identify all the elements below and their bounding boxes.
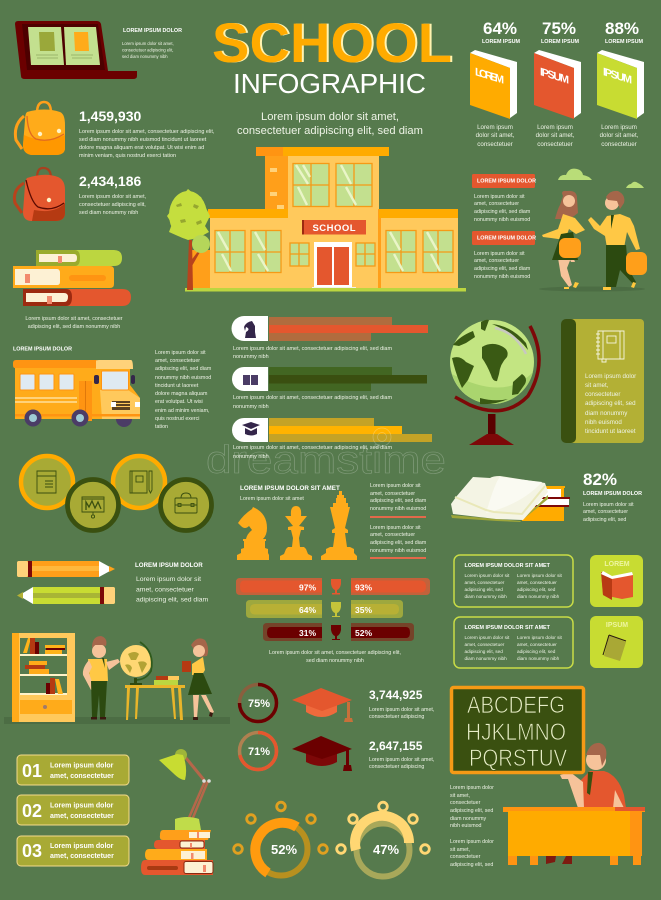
text: note body: Lorem ipsum dolor <box>585 373 636 380</box>
label: red tag two with text: amet, consectetuer <box>474 258 519 264</box>
text: teacher notes: adipiscing elit, sed <box>450 808 493 814</box>
stat: 2,434,186: consectetuer adipiscing elit, <box>79 202 146 208</box>
illustration: school building <box>185 147 466 292</box>
text: laptop caption: Lorem ipsum dolor sit amet, <box>122 41 174 46</box>
stat: 2,647,155: Lorem ipsum dolor sit amet, <box>369 757 434 763</box>
panel: outlined box one: Lorem ipsum dolor sit <box>517 573 563 578</box>
text: teacher notes: diam nonummy <box>450 816 487 822</box>
row: 64% vs 35%: 64% <box>299 605 316 615</box>
chart: ring 75%: 75% <box>248 698 270 710</box>
icon: orange book: LOREM <box>475 66 504 87</box>
stat: 64%: LOREM IPSUM <box>482 39 521 45</box>
text: books caption: Lorem ipsum dolor sit amet, consectetuer <box>25 316 123 322</box>
icon: king <box>321 491 357 560</box>
watermark: dreamstime <box>206 439 446 482</box>
text: chess notes: adipiscing elit, sed diam <box>370 540 427 546</box>
stat: 3,744,925: 3,744,925 <box>369 688 423 702</box>
row: 97% vs 93%: 97% <box>299 582 316 592</box>
illustration: classroom scene <box>4 633 230 724</box>
illustration: school bus <box>13 360 140 427</box>
panel: outlined box two: amet, consectetuer <box>517 642 557 647</box>
stat: 2,434,186 <box>79 173 147 216</box>
label: red tag two with text: LOREM IPSUM DOLOR <box>477 236 536 242</box>
text: laptop caption <box>122 28 182 59</box>
text: teacher notes: Lorem ipsum dolor <box>450 839 494 845</box>
step 01: amet, consectetuer <box>50 773 114 780</box>
illustration: two students walking <box>539 191 647 292</box>
panel: horizontal bars with icons <box>232 316 432 460</box>
icon: green book: IPSUM <box>603 66 632 87</box>
row: 97% vs 93%: 93% <box>355 582 372 592</box>
step 02: 02 <box>22 801 42 821</box>
text: chess notes: nonummy nibh euismod <box>370 548 426 554</box>
icon circle: notebook and pencil <box>113 456 165 508</box>
chart: donut 47% <box>337 802 429 876</box>
text: pencils caption: adipiscing elit, sed diam <box>136 596 208 604</box>
label: red tag one with text: adipiscing elit, sed diam <box>474 209 531 215</box>
text: note body: diam nonummy <box>585 410 628 417</box>
stat: 88%: 88% <box>605 19 639 38</box>
stat: 2,434,186: Lorem ipsum dolor sit amet, <box>79 194 147 200</box>
text: chess notes: Lorem ipsum dolor sit <box>370 483 421 489</box>
stat: 82%: LOREM IPSUM DOLOR <box>583 491 642 497</box>
title: INFOGRAPHIC <box>233 68 426 99</box>
tile: lorem book: LOREM <box>604 561 630 568</box>
title: SCHOOL <box>212 11 452 74</box>
stat: 1,459,930: dolore magna aliquam erat volutpat. Ut wisi enim ad <box>79 145 204 151</box>
panel: outlined box one: adipiscing elit, sed <box>464 587 503 592</box>
icon: knight <box>237 507 269 560</box>
text: bus description: nonummy nibh euismod <box>155 375 211 381</box>
stat: 64% <box>482 19 521 45</box>
bar row 2: book: nonummy nibh <box>233 404 269 410</box>
text: chess notes: amet, consectetuer <box>370 532 415 538</box>
panel: comparison bars with trophies <box>236 578 430 664</box>
stat: 3,744,925: consectetuer adipiscing <box>369 714 424 720</box>
text: laptop caption: sed diam nonummy nibh <box>122 54 168 59</box>
boy <box>83 636 120 720</box>
girl <box>542 191 585 289</box>
panel: outlined box two: adipiscing elit, sed <box>517 649 556 654</box>
panel: outlined box one: LOREM IPSUM DOLOR SIT AMET <box>464 563 551 569</box>
stat: 1,459,930 <box>79 108 215 159</box>
text: bus description: enim ad minim veniam, <box>155 408 209 414</box>
stat: 82%: Lorem ipsum dolor sit <box>583 502 634 508</box>
icon: dark graduation cap <box>292 736 352 771</box>
illustration: open book and stack <box>451 476 570 522</box>
illustration: desk lamp on books <box>141 749 213 875</box>
panel: outlined box two: LOREM IPSUM DOLOR SIT AMET <box>464 625 551 631</box>
stat: 3,744,925: Lorem ipsum dolor sit amet, <box>369 707 434 713</box>
step 02: amet, consectetuer <box>50 813 114 820</box>
stat: 1,459,930: 1,459,930 <box>79 108 141 124</box>
text: teacher notes: sit amet, <box>450 847 470 853</box>
step 02 <box>17 795 129 825</box>
stat: 88%: LOREM IPSUM <box>605 39 644 45</box>
label: red tag one with text: LOREM IPSUM DOLOR <box>477 178 536 184</box>
icon circle: book <box>21 456 73 508</box>
text: book captions: dolor sit amet, <box>476 132 515 139</box>
chalkboard: HJKLMNO <box>466 719 566 746</box>
text: book captions: consectetuer <box>537 141 573 148</box>
text: laptop caption: LOREM IPSUM DOLOR <box>123 28 182 34</box>
teacher <box>560 743 626 808</box>
bar row 1: chess <box>232 316 428 360</box>
stat: 82% <box>583 470 642 523</box>
heading: Lorem ipsum dolor sit amet <box>240 496 304 502</box>
row: 64% vs 35%: 35% <box>355 605 372 615</box>
text: note body: consectetuer <box>585 391 620 398</box>
panel: outlined box two: Lorem ipsum dolor sit <box>464 635 510 640</box>
text: bars caption: Lorem ipsum dolor sit amet, consectetuer adipiscing elit, <box>269 650 401 656</box>
stat: 3,744,925 <box>369 688 434 720</box>
stat: 1,459,930: Lorem ipsum dolor sit amet, consectetuer adipiscing elit, <box>79 129 215 135</box>
bar row 1: chess: nonummy nibh <box>233 354 269 360</box>
bar row 1: chess: Lorem ipsum dolor sit amet, consectetuer adipiscing elit, sed diam <box>233 346 392 352</box>
step 01: 01 <box>22 761 42 781</box>
text: teacher notes: consectetuer <box>450 800 481 806</box>
text: book captions <box>476 124 639 148</box>
row: 31% vs 52% <box>263 623 414 641</box>
panel: outlined box one: amet, consectetuer <box>517 580 557 585</box>
icon: notebook <box>596 331 624 362</box>
text: bus description: erat volutpat. Ut wisi <box>155 399 203 405</box>
label: red tag one with text: amet, consectetuer <box>474 201 519 207</box>
stat: 2,647,155: consectetuer adipiscing <box>369 764 424 770</box>
stat: 2,647,155: 2,647,155 <box>369 739 423 753</box>
panel: outlined box one <box>454 555 573 607</box>
teacher desk <box>503 807 645 865</box>
text: bars caption: sed diam nonummy nibh <box>306 658 364 664</box>
girl <box>182 638 214 720</box>
subtitle: Lorem ipsum dolor sit amet, <box>261 111 399 123</box>
panel: chess pieces <box>237 483 427 560</box>
text: chess notes: nonummy nibh euismod <box>370 506 426 512</box>
chart: donut 52% <box>234 802 327 876</box>
row: 64% vs 35% <box>246 600 403 618</box>
label: red tag two with text: nonummy nibh euismod <box>474 274 530 280</box>
text: bus description <box>155 350 212 430</box>
panel: outlined box two <box>454 617 573 668</box>
stat: 2,434,186: 2,434,186 <box>79 173 141 189</box>
panel: outlined box one: diam nonummy nibh <box>464 594 507 599</box>
text: note body: nibh euismod <box>585 419 622 426</box>
illustration: teacher and chalkboard <box>452 688 645 865</box>
icon: stack of books <box>13 250 131 306</box>
step 03: 03 <box>22 841 42 861</box>
boy <box>588 191 647 290</box>
label: red tag one with text: nonummy nibh euismod <box>474 217 530 223</box>
panel: outlined box one: diam nonummy nibh <box>517 594 560 599</box>
text: teacher notes: sit amet, <box>450 793 470 799</box>
text: bus description: tation <box>155 424 168 430</box>
illustration: school building: SCHOOL <box>312 223 356 234</box>
icon: pencils <box>17 561 115 604</box>
chart: ring 75% <box>240 684 276 722</box>
text: teacher notes: Lorem ipsum dolor <box>450 785 494 791</box>
label: red tag two with text: adipiscing elit, sed diam <box>474 266 531 272</box>
step 03 <box>17 836 129 866</box>
text: bus description: adipiscing elit, sed diam <box>155 366 212 372</box>
text: pencils caption <box>135 562 208 604</box>
row: 31% vs 52%: 31% <box>299 628 316 638</box>
step 01 <box>17 755 129 785</box>
bar row 3: graduation <box>232 418 432 460</box>
chart: ring 71% <box>240 732 276 770</box>
list: numbered steps <box>17 755 129 866</box>
stat: 75%: 75% <box>542 19 576 38</box>
panel: outlined box one: amet, consectetuer <box>464 580 505 585</box>
text: teacher notes: consectetuer <box>450 854 481 860</box>
stat: 82%: 82% <box>583 470 617 489</box>
panel: outlined box one: Lorem ipsum dolor sit <box>464 573 510 578</box>
icon: orange backpack <box>15 102 65 155</box>
text: book captions: consectetuer <box>477 141 513 148</box>
text: book captions: Lorem ipsum <box>601 124 637 131</box>
text: bus description: tincidunt ut laoreet <box>155 383 199 389</box>
stat: 88% <box>605 19 644 45</box>
icon: queen <box>280 506 312 560</box>
panel: outlined box two: amet, consectetuer <box>464 642 505 647</box>
text: chess notes: Lorem ipsum dolor sit <box>370 525 421 531</box>
step 03: Lorem ipsum dolor <box>50 843 114 850</box>
label: red tag two with text <box>472 231 536 280</box>
text: chess notes: amet, consectetuer <box>370 491 415 497</box>
stat: 2,647,155 <box>369 739 434 770</box>
stat: 75% <box>541 19 580 45</box>
tile: lorem book <box>590 555 643 607</box>
tile: ipsum book <box>590 616 643 668</box>
stat: 1,459,930: minim veniam, quis nostrud exerci tation <box>79 153 176 159</box>
watermark <box>206 428 446 482</box>
illustration: tree <box>167 189 210 290</box>
text: pencils caption: LOREM IPSUM DOLOR <box>135 562 203 569</box>
stat: 82%: adipiscing elit, sed <box>583 517 626 523</box>
label: red tag one with text: Lorem ipsum dolor sit <box>474 194 525 200</box>
text: bus description: quis nostrud exerci <box>155 416 199 422</box>
icon: red book <box>534 50 581 119</box>
stat: 1,459,930: sed diam nonummy nibh euismod tincidunt ut laoreet <box>79 137 207 143</box>
panel: outlined box two: Lorem ipsum dolor sit <box>517 635 563 640</box>
chalkboard: PQRSTUV <box>469 745 567 772</box>
chart: donut 47%: 47% <box>373 842 399 857</box>
text: teacher notes: nibh euismod <box>450 823 482 829</box>
icon: orange book <box>470 50 517 119</box>
text: teacher notes <box>450 785 494 868</box>
chalkboard <box>452 688 584 772</box>
row: 31% vs 52%: 52% <box>355 628 372 638</box>
stat: 2,434,186: sed diam nonummy nibh <box>79 210 138 216</box>
text: book captions: dolor sit amet, <box>536 132 575 139</box>
label: red tag one with text <box>472 174 536 223</box>
panel: outlined box two: diam nonummy nibh <box>517 656 560 661</box>
bar row 3: graduation: Lorem ipsum dolor sit amet, consectetuer adipiscing elit, sed diam <box>233 445 392 451</box>
subtitle: consectetuer adipiscing elit, sed diam <box>237 125 423 137</box>
panel: four icon circles <box>21 456 212 530</box>
icon circle: briefcase <box>160 480 212 530</box>
text: note body: tincidunt ut laoreet <box>585 428 636 435</box>
text: bus description: amet, consectetuer <box>155 358 200 364</box>
desk <box>125 676 185 720</box>
text: chess notes <box>370 483 427 559</box>
heading: LOREM IPSUM DOLOR SIT AMET <box>240 485 340 492</box>
icon circle: presentation board <box>68 480 118 530</box>
text: bus description: Lorem ipsum dolor sit <box>155 350 206 356</box>
panel: outlined box two: adipiscing elit, sed <box>464 649 503 654</box>
illustration: globe <box>450 320 539 445</box>
text: note body: adipiscing elit, sed <box>585 400 636 407</box>
step 03: amet, consectetuer <box>50 853 114 860</box>
text: bus description: dolore magna aliquam <box>155 391 208 397</box>
heading: bus: LOREM IPSUM DOLOR <box>13 346 72 352</box>
bar row 2: book: Lorem ipsum dolor sit amet, consectetuer adipiscing elit, sed diam <box>233 395 392 401</box>
panel: outlined box one: adipiscing elit, sed <box>517 587 556 592</box>
bookshelf <box>12 633 75 722</box>
text: pencils caption: amet, consectetuer <box>136 586 195 594</box>
title: SCHOOL <box>214 11 454 74</box>
text: book captions: consectetuer <box>601 141 637 148</box>
icon: green book <box>597 50 644 119</box>
icon: orange graduation cap <box>292 688 353 722</box>
subtitle <box>237 111 423 137</box>
text: laptop caption: consectetuer adipiscing elit, <box>122 48 173 52</box>
bar row 3: graduation: nonummy nibh <box>233 454 269 460</box>
text: bars caption <box>269 650 401 664</box>
tile: ipsum book: IPSUM <box>606 622 628 629</box>
icon: red book: IPSUM <box>540 66 569 87</box>
text: chess notes: adipiscing elit, sed diam <box>370 498 427 504</box>
icon: red backpack <box>14 168 65 221</box>
text: note body <box>585 373 636 435</box>
text: books caption <box>25 316 123 330</box>
stat: 82%: amet, consectetuer <box>583 509 628 515</box>
chalkboard: ABCDEFG <box>467 692 565 719</box>
small globe on desk <box>120 642 152 685</box>
label: red tag two with text: Lorem ipsum dolor sit <box>474 251 525 257</box>
stat: 64%: 64% <box>483 19 517 38</box>
text: books caption: adipiscing elit, sed diam nonummy nibh <box>28 324 120 330</box>
icon: laptop with books <box>15 21 137 79</box>
bar row 2: book <box>232 367 427 410</box>
chart: donut 52%: 52% <box>271 842 297 857</box>
text: book captions: Lorem ipsum <box>477 124 513 131</box>
panel: outlined box two: diam nonummy nibh <box>464 656 507 661</box>
text: book captions: Lorem ipsum <box>537 124 573 131</box>
stat: 75%: LOREM IPSUM <box>541 39 580 45</box>
step 01: Lorem ipsum dolor <box>50 762 114 770</box>
row: 97% vs 93% <box>236 578 430 595</box>
heading <box>240 485 340 502</box>
text: pencils caption: Lorem ipsum dolor sit <box>136 576 201 583</box>
text: teacher notes: adipiscing elit, sed <box>450 862 493 868</box>
text: book captions: dolor sit amet, <box>600 132 639 139</box>
panel: notebook note <box>561 319 644 443</box>
text: note body: sit amet, <box>585 382 609 389</box>
panel: three percent books <box>470 19 644 148</box>
icon: clouds <box>558 169 644 188</box>
step 02: Lorem ipsum dolor <box>50 802 114 810</box>
chart: ring 71%: 71% <box>248 746 270 758</box>
